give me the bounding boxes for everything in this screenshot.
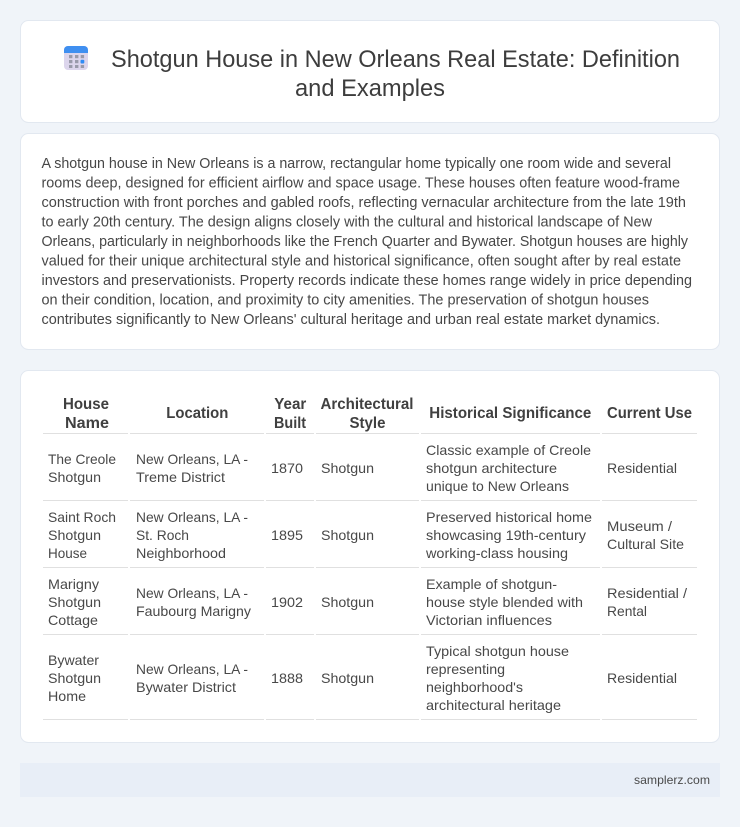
text block: description paragraph: valued for their unique architectural style and historical significance, often sought after by real estate [42, 254, 681, 270]
table row: Marigny Shotgun Cottage: Shotgun [48, 594, 101, 610]
table row: Bywater Shotgun Home: Shotgun [48, 670, 101, 686]
table row: Marigny Shotgun Cottage: Shotgun [321, 594, 374, 610]
table row: The Creole Shotgun: Classic example of Creole [426, 442, 591, 458]
title: and Examples [295, 75, 445, 102]
table row: Bywater Shotgun Home: Home [48, 688, 86, 704]
table row: The Creole Shotgun: 1870 [271, 460, 303, 476]
table header row: Built [274, 415, 306, 432]
table row: Saint Roch Shotgun House: Shotgun [321, 527, 374, 543]
table row: Bywater Shotgun Home [48, 643, 677, 713]
table row: Bywater Shotgun Home: neighborhood's [426, 679, 523, 695]
table row: Marigny Shotgun Cottage: Marigny [48, 576, 99, 592]
text block: description paragraph: contributes significantly to New Orleans' cultural heritage and urban real estate market dynamics. [42, 312, 660, 328]
title [111, 46, 680, 102]
table row: Bywater Shotgun Home: Typical shotgun house [426, 643, 569, 659]
table row: Saint Roch Shotgun House: House [48, 545, 87, 561]
table row: The Creole Shotgun: Shotgun [321, 460, 374, 476]
table row: The Creole Shotgun: Treme District [136, 469, 225, 485]
table row: Bywater Shotgun Home: New Orleans, LA - [136, 661, 248, 677]
table row: Marigny Shotgun Cottage [48, 576, 687, 628]
table row: Saint Roch Shotgun House: New Orleans, LA - [136, 509, 248, 525]
text block: description paragraph: to early 20th century. The design aligns closely with the cultural and historical landscape of New [42, 214, 653, 230]
table row: Bywater Shotgun Home: 1888 [271, 670, 303, 686]
text block: description paragraph: A shotgun house in New Orleans is a narrow, rectangular home typically one room wide and several [42, 156, 671, 172]
table row: Marigny Shotgun Cottage: 1902 [271, 594, 303, 610]
text block: description paragraph: Orleans, particularly in neighborhoods like the French Quarter and Bywater. Shotgun houses are highly [42, 234, 689, 250]
table row: Bywater Shotgun Home: architectural heritage [426, 697, 561, 713]
table row: Saint Roch Shotgun House: Museum / [607, 518, 672, 534]
table row: Marigny Shotgun Cottage: Rental [607, 603, 647, 619]
table row: The Creole Shotgun [48, 442, 677, 494]
table row: Bywater Shotgun Home: Shotgun [321, 670, 374, 686]
table row: Marigny Shotgun Cottage: Example of shotgun- [426, 576, 557, 592]
table row: Marigny Shotgun Cottage: New Orleans, LA - [136, 585, 248, 601]
table row: Saint Roch Shotgun House: showcasing 19th-century [426, 527, 586, 543]
table row: Saint Roch Shotgun House: working-class housing [425, 545, 568, 561]
table row: Saint Roch Shotgun House: St. Roch [136, 527, 189, 543]
panel: table [20, 370, 720, 742]
text block: description paragraph: on their condition, location, and proximity to city amenities. The preservation of shotgun houses [42, 292, 649, 308]
table row: Saint Roch Shotgun House: Shotgun [48, 527, 101, 543]
footer [20, 763, 720, 797]
table row: Marigny Shotgun Cottage: house style blended with [426, 594, 583, 610]
table header row: Architectural [320, 396, 414, 413]
table row: Saint Roch Shotgun House: 1895 [271, 527, 303, 543]
text block: description paragraph: construction with front porches and gabled roofs, reflecting vernacular architecture from the late 19th [42, 195, 686, 211]
table header row: Style [350, 415, 386, 432]
table row: Saint Roch Shotgun House: Saint Roch [48, 509, 116, 525]
table row: Saint Roch Shotgun House: Neighborhood [136, 545, 226, 561]
table row: Bywater Shotgun Home: Residential [607, 670, 677, 686]
table header row: House [63, 396, 109, 413]
table row: The Creole Shotgun: Shotgun [48, 469, 101, 485]
text block: description paragraph: investors and preservationists. Property records indicate these homes range widely in price depending [42, 273, 692, 289]
table row: Marigny Shotgun Cottage: Cottage [48, 612, 98, 628]
table header row: Name [65, 415, 109, 432]
table row: Bywater Shotgun Home: Bywater [48, 652, 99, 668]
table header row: Current Use [607, 405, 692, 422]
table row: The Creole Shotgun: The Creole [48, 451, 116, 467]
text block: description paragraph [42, 156, 692, 328]
title: Shotgun House in New Orleans Real Estate: Definition [111, 46, 680, 73]
text block: description paragraph: rooms deep, designed for efficient airflow and space usage. These houses often feature wood-frame [42, 176, 680, 192]
table header row: Location [166, 405, 228, 422]
table row: The Creole Shotgun: unique to New Orleans [426, 478, 569, 494]
table row: Bywater Shotgun Home: representing [426, 661, 505, 677]
table row: The Creole Shotgun: New Orleans, LA - [136, 451, 248, 467]
footer: samplerz.com [634, 773, 710, 787]
table row: The Creole Shotgun: Residential [607, 460, 677, 476]
panel: description [20, 134, 720, 350]
table row: Saint Roch Shotgun House [48, 509, 684, 561]
table row: Saint Roch Shotgun House: Cultural Site [607, 536, 684, 552]
icon: calendar [64, 46, 88, 70]
table header row [63, 396, 692, 432]
table row: Marigny Shotgun Cottage: Faubourg Marigny [136, 603, 251, 619]
table row: Marigny Shotgun Cottage: Victorian influences [426, 612, 552, 628]
table header row: Historical Significance [429, 405, 592, 422]
table row: Saint Roch Shotgun House: Preserved historical home [426, 509, 592, 525]
table row: Bywater Shotgun Home: Bywater District [136, 679, 236, 695]
table row: Marigny Shotgun Cottage: Residential / [607, 585, 687, 601]
panel: title header [20, 20, 720, 122]
table row: The Creole Shotgun: shotgun architecture [426, 460, 557, 476]
table header row: Year [274, 396, 306, 413]
